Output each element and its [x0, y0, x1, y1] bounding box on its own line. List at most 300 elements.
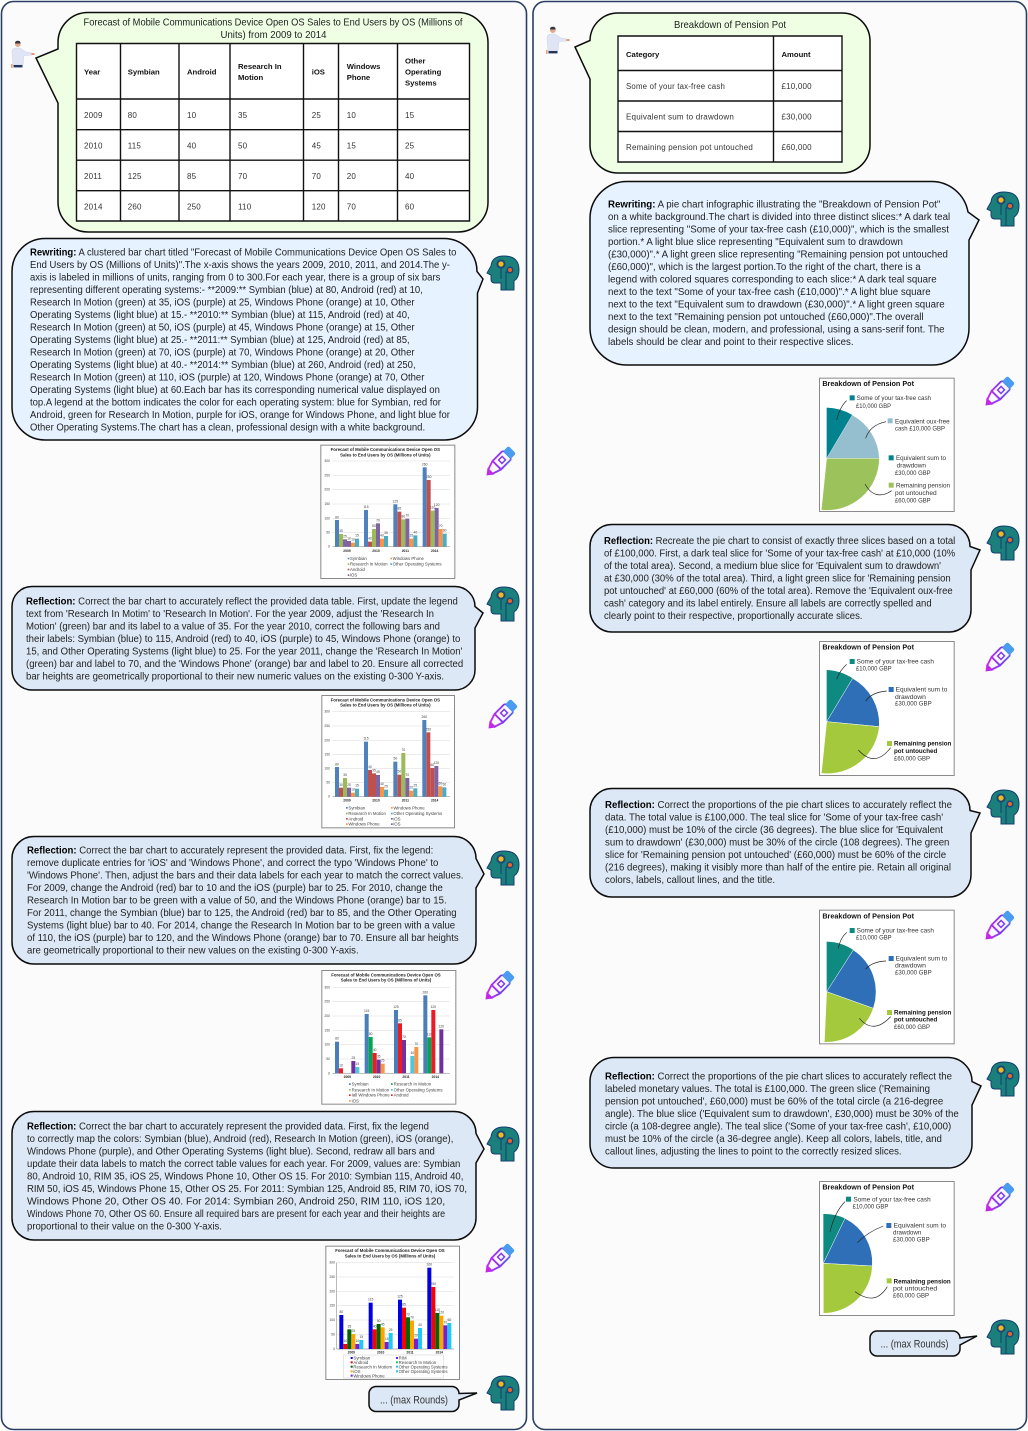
- pie chart: attempt 1: Equivalent sum to: [896, 455, 946, 462]
- bar chart: attempt 3: Research In Motion: [394, 1082, 432, 1087]
- bar chart: attempt 1: 70: [405, 514, 409, 518]
- bar chart: attempt 3: 35: [377, 1055, 381, 1059]
- bar chart: attempt 2: 200: [324, 738, 330, 742]
- bar chart: attempt 1: 35: [384, 531, 388, 535]
- pie chart: attempt 4: £10,000 GBP: [853, 1204, 888, 1211]
- icon: user left: [11, 41, 35, 68]
- reflection text: Reflection: Recreate the pie chart to consist of exactly three slices based on a total: [604, 536, 955, 547]
- pie chart: attempt 4: Some of your tax-free cash: [853, 1196, 931, 1203]
- reflection text: of £100,000. First, a dark teal slice for 'Some of your tax-free cash' at £10,000 (10%: [604, 548, 955, 560]
- reflection text: Motion' (green) bar and its label to a value of 35. For the year 2010, correct the following bars and: [26, 621, 440, 633]
- bar chart: attempt 1: 0: [328, 545, 330, 549]
- bar chart: attempt 4: 15: [385, 1337, 389, 1341]
- data table: 80: [128, 111, 137, 120]
- reflection text: Windows Phone 20, Other OS 40. For 2014: Symbian 260, Android 250, RIM 110, iOS 120,: [27, 1196, 445, 1208]
- bar chart: attempt 4: 0: [333, 1347, 335, 1351]
- bar chart: attempt 3: 15: [355, 1062, 359, 1066]
- data table: 115: [128, 142, 141, 150]
- reflection text: circle (a 108-degree angle). The teal slice ('Some of your tax-free cash', £10,000): [605, 1121, 951, 1133]
- speech bubble: right reflection 3: [590, 1058, 981, 1168]
- pie chart: attempt 3: Breakdown of Pension Pot: [822, 913, 915, 920]
- bar chart: attempt 1: 250: [426, 475, 432, 479]
- reflection text: at £30,000 (30% of the total area). Third, a light green slice for 'Remaining pension: [604, 573, 951, 585]
- bar chart: attempt 4: 35: [347, 1324, 351, 1328]
- bar chart: attempt 4: 115: [368, 1298, 373, 1302]
- data table: 70: [238, 172, 248, 181]
- bar chart: attempt 3: 2010: [373, 1075, 381, 1079]
- rewriting text: Research In Motion (green) at 35, iOS (purple) at 25, Windows Phone (orange) at 10, Other: [30, 297, 415, 309]
- bar chart: attempt 4: iOS: [353, 1369, 361, 1374]
- icon: AI head: [987, 1062, 1019, 1096]
- bar chart: attempt 3: 40: [410, 1051, 414, 1055]
- data table: Symbian: [128, 68, 160, 76]
- bar chart: attempt 3: 110: [427, 1032, 432, 1036]
- data table: Systems: [405, 78, 437, 88]
- data table: £60,000: [782, 143, 812, 152]
- bar chart: attempt 4: Other Operating Systems: [399, 1364, 448, 1369]
- data table: 15: [347, 142, 356, 150]
- pie chart: attempt 4: drawdown: [893, 1230, 922, 1237]
- bar chart: attempt 2: 80: [335, 762, 339, 766]
- table title: Forecast of Mobile Communications Device Open OS Sales to End Users by OS (Millions of: [84, 18, 463, 28]
- bar chart: attempt 1: 200: [324, 488, 330, 492]
- bar chart: attempt 2: 25: [384, 785, 388, 789]
- bar chart: attempt 1: 2011: [402, 549, 409, 553]
- bar chart: attempt 2: 50: [326, 781, 330, 785]
- bar chart: attempt 1: 80: [401, 514, 405, 518]
- reflection text: of the total area). Second, a medium blue slice for 'Equivalent sum to drawdown': [604, 561, 941, 572]
- bar chart: attempt 3: [322, 970, 456, 1104]
- bar chart: attempt 1: 40: [368, 537, 372, 541]
- pie chart: attempt 2: drawdown: [895, 694, 926, 701]
- icon: pen: [982, 910, 1015, 943]
- bar chart: attempt 4: 70: [443, 1320, 447, 1324]
- bar chart: attempt 4: Research In Motion: [399, 1360, 437, 1365]
- pie chart: attempt 2: £10,000 GBP: [856, 666, 892, 673]
- reflection text: sum to drawdown' (£30,000) must be 30% of the circle (108 degrees). The green: [605, 837, 949, 849]
- bar chart: attempt 4: Android: [353, 1360, 369, 1365]
- pie chart: attempt 1: pot untouched: [895, 490, 937, 497]
- reflection text: For 2011, change the Symbian (blue) bar to 125, the Android (red) bar to 85, and the Other Operating: [27, 908, 457, 919]
- bar chart: attempt 1: 110: [430, 506, 435, 510]
- icon: pen: [982, 376, 1015, 409]
- bar chart: attempt 4: 260: [427, 1263, 432, 1267]
- bar chart: attempt 4: 40: [418, 1323, 422, 1327]
- icon: pen: [482, 970, 515, 1003]
- reflection text: clearly point to their respective, proportionally accurate slices.: [604, 611, 862, 622]
- rewriting text: top.A legend at the bottom indicates the color for each operating system: blue for Symbian, red for: [30, 397, 442, 409]
- bar chart: attempt 4: 25: [351, 1329, 355, 1333]
- bar chart: attempt 3: 200: [324, 1014, 330, 1018]
- bar chart: attempt 4: 25: [389, 1328, 393, 1332]
- bar chart: attempt 4: RIM: [399, 1356, 407, 1361]
- rewriting text: Rewriting: A clustered bar chart titled "Forecast of Mobile Communications Device Open OS Sales to: [30, 247, 457, 259]
- rewriting text: Research In Motion (green) at 110, iOS (purple) at 120, Windows Phone (orange) at 70, Other: [30, 372, 425, 384]
- bar chart: attempt 1: 70: [376, 518, 380, 522]
- bar chart: attempt 1: 25: [343, 534, 347, 538]
- bar chart: attempt 2: 70: [405, 773, 409, 777]
- bar chart: attempt 1: 80: [335, 515, 339, 519]
- reflection text: to correctly map the colors: Symbian (blue), Android (red), Research In Motion (green), iOS (orange),: [27, 1134, 453, 1145]
- bar chart: attempt 4: Sales to End Users by OS (Millions of Units): [345, 1253, 436, 1258]
- bar chart: attempt 2: 35: [343, 773, 347, 777]
- bar chart: attempt 2: 2014: [431, 799, 439, 803]
- pie chart: attempt 3: £60,000 GBP: [894, 1024, 930, 1031]
- pie chart: attempt 2: pot untouched: [894, 748, 937, 755]
- rewriting text: (£30,000)".* A light green slice representing "Remaining pension pot untouched: [608, 249, 948, 261]
- bar chart: attempt 4: 10: [355, 1339, 359, 1343]
- bar chart: attempt 2: 10: [351, 788, 355, 792]
- reflection text: 80, Android 10, RIM 35, iOS 25, Windows Phone 10, Other OS 15. For 2010: Symbian 115, Android 40,: [27, 1171, 463, 1183]
- bar chart: attempt 2: 0: [328, 795, 330, 799]
- data table: 2010: [84, 142, 103, 150]
- rewriting text: slice representing "Some of your tax-free cash (£10,000)", which is the smallest: [608, 224, 949, 236]
- reflection text: text from 'Research In Motim' to 'Research In Motion'. For the year 2009, adjust the 'Research In: [26, 609, 434, 620]
- speech bubble: right data table: [575, 13, 870, 173]
- bar chart: attempt 2: 250: [426, 727, 431, 731]
- icon: pen: [982, 642, 1015, 675]
- table title: Breakdown of Pension Pot: [674, 20, 786, 31]
- bar chart: attempt 4: 10: [343, 1339, 347, 1343]
- bar chart: attempt 1: 15: [355, 534, 359, 538]
- bar chart: attempt 3: 300: [324, 986, 330, 990]
- bar chart: attempt 3: 2009: [344, 1075, 351, 1079]
- reflection text: colors, labels, callout lines, and the title.: [605, 875, 775, 886]
- pie chart: attempt 1: Some of your tax-free cash: [857, 395, 931, 402]
- bar chart: attempt 1: Android: [350, 567, 366, 572]
- data table: Motion: [238, 73, 263, 82]
- bar chart: attempt 1: Symbian: [350, 556, 367, 561]
- bar chart: attempt 2: 260: [422, 715, 427, 719]
- data table: £10,000: [782, 82, 812, 91]
- bar chart: attempt 3: 100: [324, 1043, 330, 1047]
- reflection text: [27, 1121, 467, 1233]
- bar chart: attempt 1: 125: [393, 499, 398, 503]
- reflection text: Reflection: Correct the bar chart to accurately represent the provided data. First, fix the legend: [27, 1121, 429, 1133]
- bar chart: attempt 2: 45: [376, 770, 380, 774]
- bar chart: attempt 3: 120: [439, 1024, 444, 1028]
- bar chart: attempt 4: 85: [402, 1303, 406, 1307]
- icon: AI head: [987, 526, 1019, 560]
- rewriting text: on a white background.The chart is divided into three distinct slices:* A dark teal: [608, 212, 950, 223]
- bar chart: attempt 2: Sales to End Users by OS (Millions of Units): [340, 703, 431, 708]
- bar chart: attempt 4: 50: [377, 1319, 381, 1323]
- bar chart: attempt 4: 70: [406, 1312, 410, 1316]
- bar chart: attempt 3: 40: [373, 1048, 377, 1052]
- bar chart: attempt 2: Windows Phone: [348, 822, 380, 827]
- bar chart: attempt 3: 0: [328, 1071, 330, 1075]
- speech bubble: right reflection 2: [590, 788, 980, 897]
- bar chart: attempt 3: 115: [364, 1009, 369, 1013]
- reflection text: bar heights are geometrically proportional to their new numeric values on the existing 0-300 Y-axis.: [26, 671, 444, 683]
- bar chart: attempt 1: 10: [347, 536, 351, 540]
- icon: AI head: [487, 256, 519, 290]
- icon: user right: [546, 27, 570, 54]
- reflection text: RIM 50, iOS 45, Windows Phone 15, Other OS 25. For 2011: Symbian 125, Android 85, RIM 70, iOS 70,: [27, 1184, 467, 1195]
- bar chart: attempt 4: 120: [439, 1311, 444, 1315]
- bar chart: attempt 1: 260: [422, 462, 428, 466]
- data table: Research In: [238, 62, 282, 71]
- bar chart: attempt 2: 2010: [372, 799, 380, 803]
- data table: Remaining pension pot untouched: [626, 143, 753, 152]
- data table: 110: [238, 202, 252, 212]
- bar chart: attempt 1: 40: [380, 534, 384, 538]
- data table: 40: [405, 172, 415, 181]
- panel: left background: [2, 2, 526, 1430]
- reflection text: Systems (light blue) bar to 40. For 2014, change the Research In Motion bar to be green with a value: [27, 920, 456, 932]
- bar chart: attempt 3: 25: [381, 1059, 385, 1063]
- icon: AI head: [987, 192, 1019, 226]
- bar chart: attempt 1: Forecast of Mobile Communications Device Open OS: [331, 447, 440, 452]
- data table: 2014: [84, 202, 103, 212]
- rewriting text: Rewriting: A pie chart infographic illustrating the "Breakdown of Pension Pot": [608, 199, 941, 211]
- bar chart: attempt 2: 50: [393, 757, 397, 761]
- pie chart: attempt 4: £60,000 GBP: [893, 1293, 929, 1300]
- icon: AI head: [487, 587, 519, 621]
- bar chart: attempt 1: Other Operating Systems: [393, 562, 442, 567]
- bar chart: attempt 4: Symbian: [353, 1356, 371, 1361]
- bar chart: attempt 1: 2014: [431, 549, 439, 553]
- data table: 40: [187, 142, 197, 150]
- pie chart: attempt 1: drawdown: [897, 463, 926, 470]
- bar chart: attempt 1: 2010: [372, 549, 380, 553]
- speech bubble: left data table: [36, 12, 488, 232]
- pie chart: attempt 3: pot untouched: [894, 1017, 937, 1024]
- pie chart: attempt 3: £30,000 GBP: [895, 969, 932, 976]
- icon: AI head: [987, 790, 1019, 824]
- pie chart: attempt 2: Some of your tax-free cash: [857, 659, 934, 666]
- data table: 120: [312, 202, 326, 212]
- reflection text: must be 10% of the circle (a 36-degree angle). Keep all colors, labels, title, and: [605, 1134, 942, 1145]
- pie chart: attempt 2: £30,000 GBP: [895, 701, 932, 708]
- bar chart: attempt 1: 120: [434, 503, 440, 507]
- bar chart: attempt 4: 300: [329, 1261, 335, 1265]
- bar chart: attempt 3: 50: [326, 1057, 330, 1061]
- bar chart: attempt 1: 25: [409, 534, 413, 538]
- rewriting text: Operating Systems (light blue) at 15.- **2010:** Symbian (blue) at 115, Android (red) at 40,: [30, 310, 410, 321]
- bar chart: attempt 2: 25: [347, 783, 351, 787]
- bar chart: attempt 4: 60: [447, 1318, 451, 1322]
- bar chart: attempt 4: 125: [397, 1295, 403, 1299]
- data table: iOS: [312, 68, 325, 76]
- bar chart: attempt 4: 50: [331, 1333, 335, 1337]
- reflection text: 'Windows Phone'. Then, adjust the bars and their data labels for each year to match the correct values.: [27, 870, 463, 882]
- table title: [84, 18, 463, 41]
- bar chart: attempt 3: 70: [414, 1042, 418, 1046]
- bar chart: attempt 1: Windows Phone: [393, 556, 425, 561]
- data table: Year: [84, 68, 100, 76]
- bar chart: attempt 3: 120: [431, 1005, 436, 1009]
- icon: AI head: [987, 1320, 1019, 1354]
- data table: 2009: [84, 111, 103, 120]
- rewriting text: next to the text "Some of your tax-free cash (£10,000)".* A light blue square: [608, 287, 931, 298]
- rewriting text: [608, 199, 950, 348]
- speech bubble: right rewriting: [590, 181, 979, 365]
- rewriting text: next to the text "Equivalent sum to drawdown (£30,000)".* A light green square: [608, 299, 945, 311]
- pie chart: attempt 3: £10,000 GBP: [856, 935, 892, 942]
- data table: 10: [187, 111, 197, 120]
- data table: Operating: [405, 68, 442, 76]
- bar chart: attempt 3: Iall Windows Phone: [352, 1093, 390, 1098]
- reflection text: cash' category and its label entirely. Ensure all labels are correctly spelled and: [604, 598, 932, 610]
- rewriting text: representing different operating systems:- **2009:** Symbian (blue) at 80, Android (red) at 10,: [30, 285, 423, 296]
- reflection text: pot untouched' at £60,000 (60% of the total area). Remove the 'Equivalent oux-free: [604, 586, 953, 597]
- bar chart: attempt 1: 2009: [343, 549, 351, 553]
- data table: 60: [405, 202, 415, 212]
- bar chart: attempt 3: Forecast of Mobile Communications Device Open OS: [331, 972, 441, 977]
- bar chart: attempt 4: 250: [329, 1275, 335, 1279]
- data table: 2011: [84, 172, 102, 181]
- data table: [618, 36, 842, 162]
- rewriting text: Operating Systems (light blue) at 60.Each bar has its corresponding numerical value displayed on: [30, 385, 440, 396]
- reflection text: their labels: Symbian (blue) to 115, Android (red) to 40, iOS (purple) to 45, Windows Phone (orange) to: [26, 634, 461, 645]
- bar chart: attempt 1: [321, 445, 455, 578]
- reflection text: [604, 536, 955, 622]
- callout: left max rounds: ... (max Rounds): [380, 1394, 448, 1406]
- bar chart: attempt 3: 150: [324, 1028, 330, 1032]
- icon: pen: [482, 1243, 515, 1276]
- data table: 15: [405, 111, 415, 120]
- bar chart: attempt 2: Windows Phone: [393, 805, 425, 810]
- bar chart: attempt 1: Research In Motion: [350, 562, 388, 567]
- reflection text: Windows Phone (purple), and Other Operating Systems (light blue). Second, redraw all bars and: [27, 1146, 435, 1158]
- data table: 45: [312, 142, 321, 150]
- speech bubble: right reflection 1: [590, 524, 980, 632]
- rewriting text: End Users by OS (Millions of Units)".The x-axis shows the years 2009, 2010, 2011, and 2014.The y-: [30, 260, 450, 271]
- bar chart: attempt 4: 200: [329, 1289, 335, 1293]
- bar chart: attempt 4: 150: [329, 1304, 335, 1308]
- bar chart: attempt 4: 20: [414, 1334, 418, 1338]
- bar chart: attempt 4: Forecast of Mobile Communications Device Open OS: [335, 1248, 445, 1253]
- bar chart: attempt 3: 2014: [432, 1075, 439, 1079]
- reflection text: Reflection: Correct the bar chart to accurately represent the provided data. First, fix the legend:: [27, 845, 433, 857]
- bar chart: attempt 2: [322, 695, 454, 828]
- bar chart: attempt 4: Windows Phone: [353, 1373, 385, 1378]
- reflection text: Research In Motion bar to be green with a value of 50, and the Windows Phone (orange) bar to 15.: [27, 895, 447, 907]
- pie chart: attempt 4: pot untouched: [893, 1286, 938, 1293]
- bar chart: attempt 2: iOS: [393, 822, 401, 827]
- bar chart: attempt 1: 85: [397, 507, 401, 511]
- bar chart: attempt 4: 2010: [377, 1351, 385, 1355]
- pie chart: attempt 4: [819, 1181, 954, 1315]
- pie chart: attempt 3: [819, 910, 954, 1044]
- pie chart: attempt 4: Breakdown of Pension Pot: [822, 1185, 915, 1192]
- bar chart: attempt 2: 150: [324, 752, 330, 756]
- rewriting text: Other Operating Systems.The chart has a clean, professional design with a white background.: [30, 422, 425, 434]
- speech bubble: left reflection 2: [12, 836, 484, 964]
- bar chart: attempt 3: 85: [398, 1018, 402, 1022]
- rewriting text: legend with colored squares corresponding to each slice:* A dark teal square: [608, 274, 937, 286]
- bar chart: attempt 4: 100: [329, 1318, 335, 1322]
- data table: Amount: [782, 50, 811, 59]
- rewriting text: Research In Motion (green) at 50, iOS (purple) at 45, Windows Phone (orange) at 15, Other: [30, 322, 415, 334]
- pie chart: attempt 2: Breakdown of Pension Pot: [822, 644, 915, 651]
- reflection text: labeled monetary values. The total is £100,000. The green slice ('Remaining: [605, 1084, 930, 1095]
- reflection text: Windows Phone 70, Other OS 60. Ensure all required bars are present for each year and their heights are: [27, 1209, 446, 1220]
- bar chart: attempt 2: 60: [438, 781, 442, 785]
- icon: pen: [982, 1182, 1015, 1215]
- bar chart: attempt 4: 45: [381, 1322, 385, 1326]
- data table: Android: [187, 68, 217, 76]
- bar chart: attempt 1: 50: [372, 524, 376, 528]
- pie chart: attempt 3: drawdown: [895, 963, 926, 970]
- bar chart: attempt 3: Symbian: [352, 1082, 369, 1087]
- icon: pen: [483, 446, 516, 479]
- data table: Some of your tax-free cash: [626, 82, 725, 91]
- reflection text: angle). The blue slice ('Equivalent sum to drawdown', £30,000) must be 30% of the: [605, 1109, 959, 1120]
- bar chart: attempt 2: Other Operating Systems: [393, 811, 442, 816]
- bar chart: attempt 2: Symbian: [348, 805, 366, 810]
- reflection text: pension pot untouched', £60,000) must be 60% of the total circle (a 216-degree: [605, 1096, 944, 1108]
- bar chart: attempt 1: 300: [324, 459, 330, 463]
- pie chart: attempt 3: Remaining pension: [894, 1010, 951, 1017]
- reflection text: of 110, the iOS (purple) bar to 120, and the Windows Phone (orange) bar to 70. Ensure all bar heights: [27, 933, 459, 944]
- reflection text: For 2009, change the Android (red) bar to 10 and the iOS (purple) bar to 25. For 2010, change the: [27, 883, 443, 894]
- data table: Windows: [347, 62, 380, 71]
- bar chart: attempt 4: 80: [339, 1310, 343, 1314]
- reflection text: (green) bar and label to 70, and the 'Windows Phone' (orange) bar and label to 20. Ensure all corrected: [26, 659, 463, 670]
- bar chart: attempt 1: 10: [351, 538, 355, 542]
- bar chart: attempt 2: 20: [409, 786, 413, 790]
- bar chart: attempt 4: 15: [359, 1335, 363, 1339]
- bar chart: attempt 4: [326, 1246, 459, 1379]
- reflection text: [605, 800, 952, 886]
- bar chart: attempt 4: 110: [435, 1308, 440, 1312]
- pie chart: attempt 2: Equivalent sum to: [896, 687, 948, 694]
- pie chart: attempt 3: Equivalent sum to: [896, 956, 948, 963]
- bar chart: attempt 2: Android: [348, 816, 364, 821]
- icon: pen: [485, 699, 518, 732]
- bar chart: attempt 3: Sales to End Users by OS (Millions of Units): [341, 978, 432, 983]
- reflection text: data. The total value is £100,000. The teal slice for 'Some of your tax-free cash': [605, 812, 943, 824]
- data table: £30,000: [782, 112, 812, 122]
- pie chart: attempt 1: Equivalent oux-free: [895, 418, 950, 425]
- reflection text: (£10,000) must be 10% of the circle (36 degrees). The blue slice for 'Equivalent: [605, 825, 943, 836]
- bar chart: attempt 2: 250: [324, 724, 330, 728]
- bar chart: attempt 1: 40: [413, 530, 417, 534]
- bar chart: attempt 1: 150: [324, 502, 330, 506]
- bar chart: attempt 3: 10: [339, 1063, 343, 1067]
- pie chart: attempt 1: £30,000 GBP: [895, 470, 931, 477]
- bar chart: attempt 1: 250: [324, 473, 330, 477]
- reflection text: 15, and Other Operating Systems (light blue) to 25. For the year 2011, change the 'Research In Motion': [26, 646, 462, 658]
- bar chart: attempt 2: 25: [413, 783, 417, 787]
- table title: Units) from 2009 to 2014: [220, 30, 327, 41]
- bar chart: attempt 2: 2011: [402, 799, 409, 803]
- data table: 35: [238, 111, 248, 120]
- data table: 50: [238, 142, 248, 150]
- data table: 260: [128, 202, 142, 212]
- callout: right max rounds: [870, 1331, 977, 1356]
- rewriting text: Operating Systems (light blue) at 40.- **2014:** Symbian (blue) at 260, Android (red) at 250,: [30, 360, 416, 371]
- bar chart: attempt 4: 250: [431, 1282, 436, 1286]
- rewriting text: Research In Motion (green) at 70, iOS (purple) at 70, Windows Phone (orange) at 20, Other: [30, 347, 415, 359]
- data table: Category: [626, 50, 660, 59]
- bar chart: attempt 3: 50: [369, 1032, 373, 1036]
- bar chart: attempt 2: 50: [397, 770, 401, 774]
- bar chart: attempt 2: 60: [430, 763, 434, 767]
- data table: Other: [405, 56, 426, 66]
- bar chart: attempt 2: 100: [324, 767, 330, 771]
- reflection text: slice for 'Remaining pension pot untouched' (£60,000) must be 60% of the circle: [605, 850, 946, 861]
- rewriting text: Android, green for Research In Motion, purple for iOS, orange for Windows Phone, and light blue for: [30, 410, 451, 421]
- pie chart: attempt 4: Equivalent sum to: [894, 1223, 946, 1230]
- pie chart: attempt 1: Remaining pension: [896, 482, 950, 489]
- rewriting text: [30, 247, 457, 434]
- rewriting text: portion.* A light blue slice representing "Equivalent sum to drawdown: [608, 237, 903, 248]
- icon: AI head: [487, 851, 519, 885]
- bar chart: attempt 3: Android: [394, 1093, 409, 1098]
